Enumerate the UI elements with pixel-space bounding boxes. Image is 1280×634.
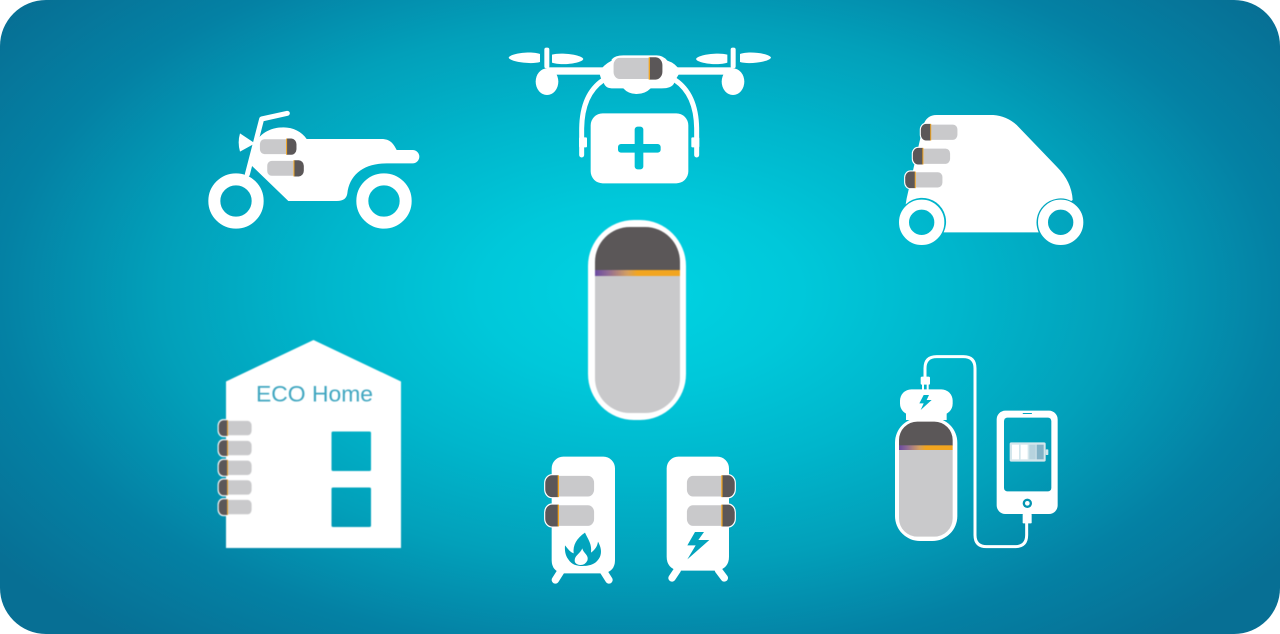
front wheel	[214, 179, 258, 223]
phone battery indicator	[1010, 442, 1048, 462]
rear wheel	[362, 179, 406, 223]
right propeller	[696, 48, 771, 95]
central large battery cell	[588, 220, 686, 420]
upper window	[332, 432, 371, 471]
power bank cap	[900, 389, 953, 420]
smartphone	[997, 411, 1058, 523]
gas heater body	[552, 457, 615, 573]
car body	[906, 115, 1073, 232]
electric heater body	[667, 457, 729, 571]
drone arms and body	[547, 55, 733, 94]
car battery cell 1	[921, 124, 958, 141]
icon: medical delivery drone	[509, 48, 771, 183]
icon: flame	[565, 533, 601, 566]
drone carrying arms	[579, 80, 699, 155]
gas heater legs	[555, 570, 609, 580]
gas heater battery cell 2	[545, 504, 595, 527]
motorcycle body	[252, 127, 419, 201]
car battery cell 2	[913, 148, 951, 165]
drone battery cell	[613, 57, 663, 80]
icon: electric heater with batteries	[667, 457, 735, 578]
car left wheel	[904, 205, 939, 240]
motorcycle battery cell 2	[266, 160, 304, 177]
icon: electric motorcycle	[214, 113, 419, 223]
electric heater battery cell 1	[686, 475, 735, 497]
icon: lightning bolt	[687, 532, 709, 559]
motorcycle battery cell 1	[259, 138, 297, 155]
lower window	[332, 488, 371, 527]
icon: gas heater with batteries	[545, 457, 615, 580]
left propeller	[509, 48, 583, 95]
heading: ECO Home: ECO Home	[256, 382, 373, 406]
plug	[921, 377, 930, 390]
house battery stack	[218, 420, 252, 515]
charging cable	[925, 357, 1027, 547]
icon: power bank charging phone	[895, 357, 1058, 547]
icon: ECO Home house	[218, 340, 401, 548]
gas heater battery cell 1	[545, 475, 595, 497]
handlebar and fork	[239, 113, 287, 174]
car battery cell 3	[905, 171, 943, 188]
house shape	[226, 340, 401, 548]
power bank cell	[895, 418, 957, 541]
car right wheel	[1043, 205, 1078, 240]
icon: electric car	[904, 115, 1078, 240]
electric heater legs	[672, 570, 724, 578]
first aid box	[591, 113, 688, 183]
electric heater battery cell 2	[686, 504, 735, 527]
